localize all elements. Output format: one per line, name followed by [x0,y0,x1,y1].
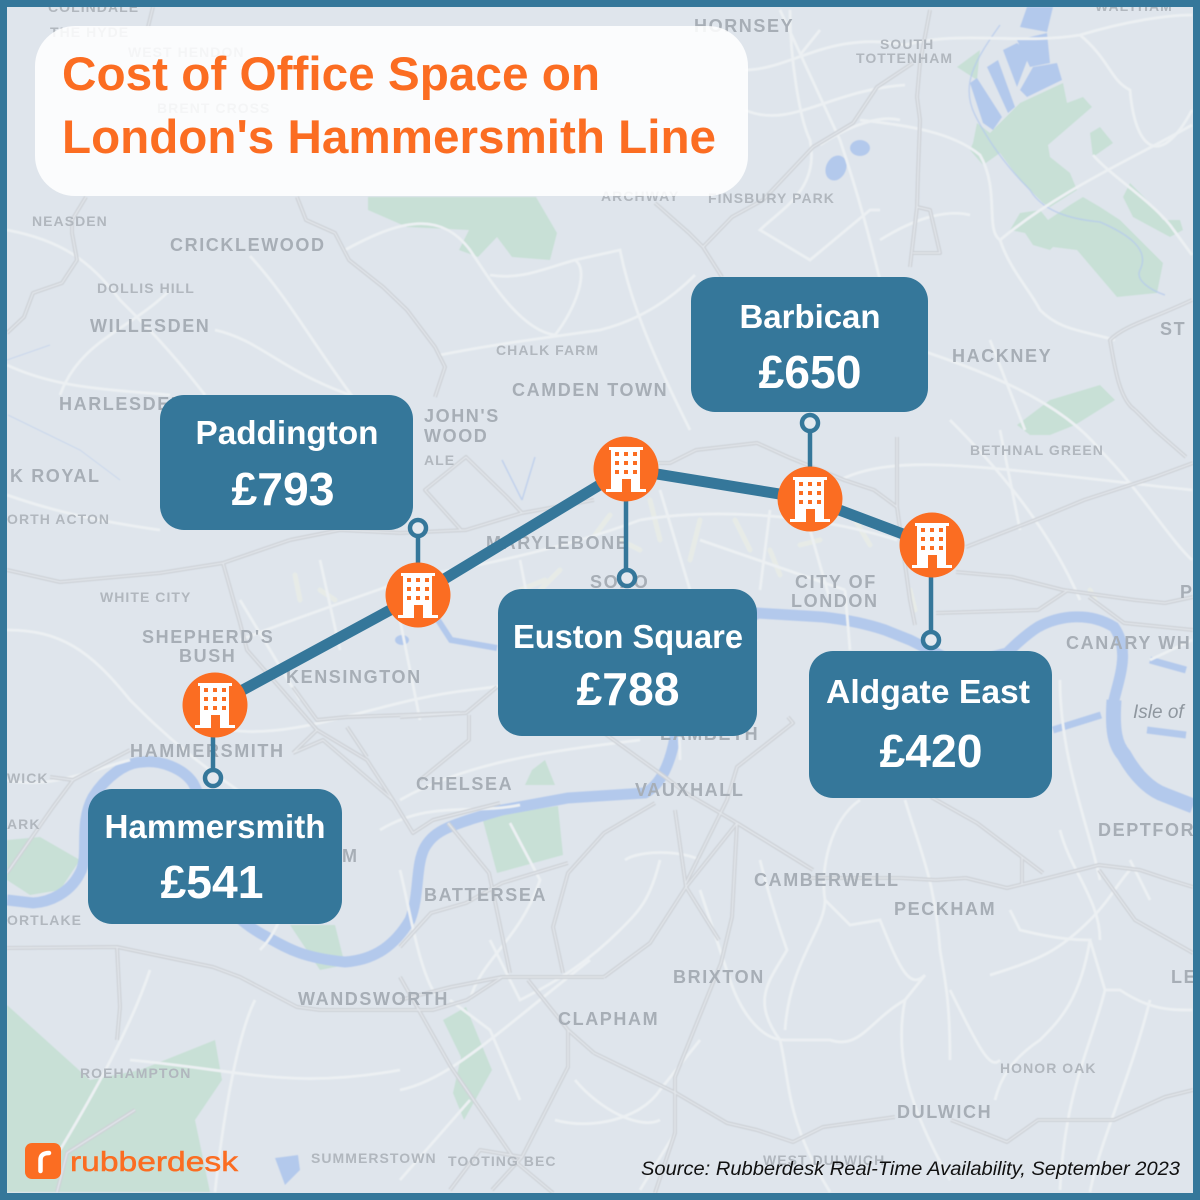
map labels: HARLESDEN [59,394,185,414]
map labels: HONOR OAK [1000,1060,1097,1076]
title: Cost of Office Space on [62,47,600,100]
map labels: HACKNEY [952,346,1052,366]
map labels: KENSINGTON [286,667,422,687]
map labels: P [1180,582,1194,602]
panel: Hammersmith: Hammersmith [104,808,326,845]
panel: Paddington [160,395,413,530]
panel: Euston Square: Euston Square [513,618,743,655]
map labels: HORNSEY [694,16,794,36]
map labels: CLAPHAM [558,1009,659,1029]
map labels: NEASDEN [32,213,108,229]
map labels: ORTH ACTON [7,511,110,527]
map labels: BRIXTON [673,967,765,987]
icon: Euston Square building [594,436,658,502]
map labels: CAMDEN TOWN [512,380,668,400]
stem and marker: Euston Square [619,495,635,586]
map labels: ARK [7,816,40,832]
logo wordmark: rubberdesk [70,1146,239,1177]
map labels: CRICKLEWOOD [170,235,326,255]
map labels: BETHNAL GREEN [970,442,1104,458]
icon: Aldgate East building [900,512,964,578]
map labels: FINSBURY PARK [708,190,835,206]
map labels: DULWICH [897,1102,992,1122]
panel: Aldgate East: Aldgate East [826,673,1030,710]
map labels: BUSH [179,646,236,666]
panel: Barbican [691,277,928,412]
icon: rubberdesk logo mark [25,1143,61,1179]
map labels: WICK [7,770,49,786]
map labels: ST [1160,319,1186,339]
panel: Aldgate East [809,651,1052,798]
stem and marker: Paddington [410,520,426,565]
map labels: MARYLEBONE [486,533,629,553]
stem and marker: Barbican [802,415,818,470]
panel: Paddington: Paddington [196,414,378,451]
map labels: ORTLAKE [7,912,82,928]
panel: Paddington: £793 [232,463,334,515]
map labels: SOHO [590,572,649,592]
map labels: THE HYDE [50,24,129,40]
map labels: ARCHWAY [601,188,679,204]
panel: Hammersmith: £541 [160,856,264,908]
map labels: SHEPHERD'S [142,627,274,647]
map labels: CHALK FARM [496,342,599,358]
panel: Aldgate East: £420 [880,725,982,777]
panel: Barbican: £650 [758,346,862,398]
map labels: JOHN'S [424,406,500,426]
icon: Hammersmith building [182,672,248,738]
title: London's Hammersmith Line [62,110,716,163]
stem and marker: Aldgate East [923,570,939,648]
panel: Euston Square [498,589,757,736]
map labels: TOOTING BEC [448,1153,557,1169]
map labels: K ROYAL [10,466,101,486]
map labels: HAMMERSMITH [130,741,285,761]
panel: Barbican: Barbican [740,298,880,335]
map labels: DOLLIS HILL [97,280,195,296]
map labels: WEST HENDON [128,44,245,60]
source note: Source: Rubberdesk Real-Time Availability, September 2023 [641,1159,1180,1180]
map labels: WEST DULWICH [763,1152,885,1168]
map labels: WANDSWORTH [298,989,449,1009]
map labels: CAMBERWELL [754,870,900,890]
map labels: VAUXHALL [635,780,744,800]
panel: Hammersmith [88,789,342,924]
map labels: PECKHAM [894,899,996,919]
stem and marker: Hammersmith [205,735,221,786]
panel: Euston Square: £788 [576,663,680,715]
map labels: ALE [424,452,455,468]
map labels: DEPTFOR [1098,820,1195,840]
map labels: SUMMERSTOWN [311,1150,437,1166]
title [62,47,716,163]
icon: Paddington building [386,562,450,628]
title panel [35,26,748,196]
map labels: TOTTENHAM [856,50,953,66]
map labels: CANARY WH [1066,633,1191,653]
map labels: WOOD [424,426,488,446]
map labels: LONDON [791,591,879,611]
map labels: CHELSEA [416,774,513,794]
map labels: WHITE CITY [100,589,191,605]
map labels: LAMBETH [660,724,759,744]
map labels: ROEHAMPTON [80,1065,191,1081]
icon: Barbican building [778,466,842,532]
map labels: M [342,846,359,866]
map labels: CITY OF [795,572,877,592]
map labels: BATTERSEA [424,885,547,905]
route line [215,469,932,705]
map labels: LE [1171,967,1197,987]
map labels: BRENT CROSS [157,100,270,116]
map labels: SOUTH [880,36,934,52]
map labels: WILLESDEN [90,316,210,336]
map labels: Isle of [1133,702,1185,723]
